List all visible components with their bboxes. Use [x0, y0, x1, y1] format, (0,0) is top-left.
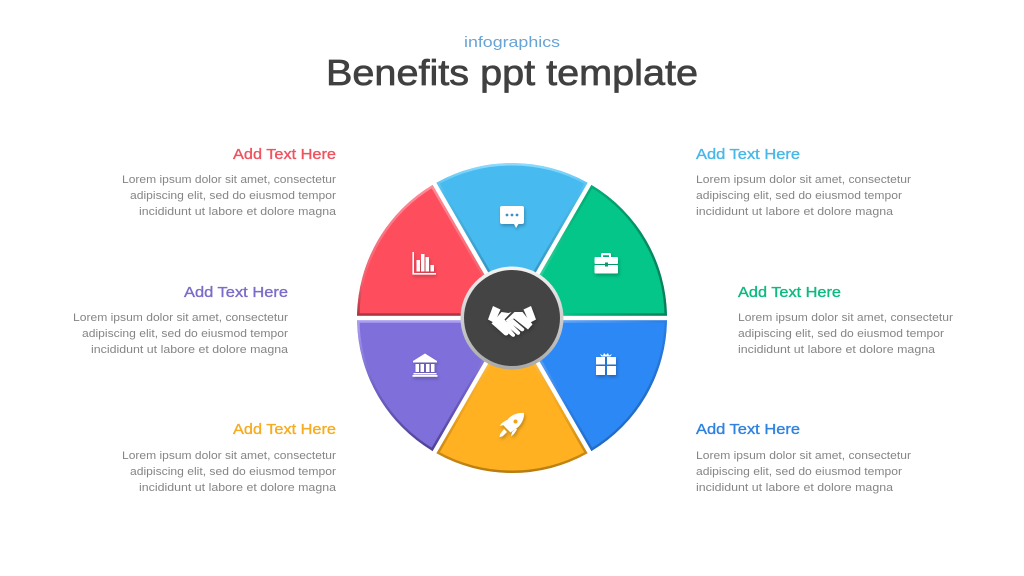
center hub — [460, 266, 564, 370]
text block: purple, middle left: Add Text Here — [184, 284, 288, 301]
text block: light blue, top right: adipiscing elit, sed do eiusmod tempor — [696, 190, 902, 202]
text block: purple, middle left: incididunt ut labore et dolore magna — [91, 344, 289, 356]
text block: green, middle right: Lorem ipsum dolor sit amet, consectetur — [738, 312, 953, 324]
icon: handshake — [488, 306, 536, 337]
text block: orange, bottom left: Add Text Here — [233, 421, 336, 438]
icon: gift box — [596, 353, 616, 375]
text block: orange, bottom left — [122, 421, 337, 494]
text block: blue, bottom right: incididunt ut labore et dolore magna — [696, 482, 894, 494]
segment: blue — [540, 320, 667, 452]
text block: green, middle right: adipiscing elit, sed do eiusmod tempor — [738, 328, 944, 340]
icon: bank — [412, 354, 438, 377]
eyebrow: infographics: infographics — [464, 35, 560, 51]
icon: rocket — [500, 413, 524, 437]
text block: green, middle right — [738, 284, 953, 356]
title: Benefits ppt template — [326, 52, 698, 93]
text block: red, top left — [122, 146, 337, 218]
text block: light blue, top right: Add Text Here — [696, 146, 800, 163]
text block: blue, bottom right: Lorem ipsum dolor sit amet, consectetur — [696, 450, 911, 462]
segment: orange — [436, 364, 588, 473]
text block: green, middle right: Add Text Here — [738, 284, 841, 301]
text block: purple, middle left: adipiscing elit, sed do eiusmod tempor — [82, 328, 288, 340]
text block: purple, middle left: Lorem ipsum dolor sit amet, consectetur — [73, 312, 288, 324]
text block: light blue, top right: incididunt ut labore et dolore magna — [696, 206, 894, 218]
text block: blue, bottom right — [696, 421, 911, 494]
text block: orange, bottom left: incididunt ut labore et dolore magna — [139, 482, 337, 494]
text block: blue, bottom right: Add Text Here — [696, 421, 800, 438]
text block: red, top left: adipiscing elit, sed do eiusmod tempor — [130, 190, 336, 202]
text block: red, top left: incididunt ut labore et dolore magna — [139, 206, 337, 218]
icon: speech bubble — [500, 206, 524, 228]
text block: blue, bottom right: adipiscing elit, sed do eiusmod tempor — [696, 466, 902, 478]
icon: briefcase — [594, 253, 618, 274]
text block: orange, bottom left: adipiscing elit, sed do eiusmod tempor — [130, 466, 336, 478]
text block: green, middle right: incididunt ut labore et dolore magna — [738, 344, 936, 356]
text block: red, top left: Lorem ipsum dolor sit amet, consectetur — [122, 174, 336, 186]
text block: light blue, top right: Lorem ipsum dolor sit amet, consectetur — [696, 174, 911, 186]
text block: purple, middle left — [73, 284, 289, 356]
segment: red — [357, 185, 484, 316]
wheel diagram — [357, 163, 667, 473]
text block: light blue, top right — [696, 146, 911, 218]
segment: green — [540, 184, 667, 316]
text block: orange, bottom left: Lorem ipsum dolor sit amet, consectetur — [122, 450, 336, 462]
text block: red, top left: Add Text Here — [233, 146, 336, 163]
segment: purple — [357, 320, 484, 452]
segment: light blue — [436, 163, 588, 272]
icon: bar chart — [412, 252, 436, 275]
